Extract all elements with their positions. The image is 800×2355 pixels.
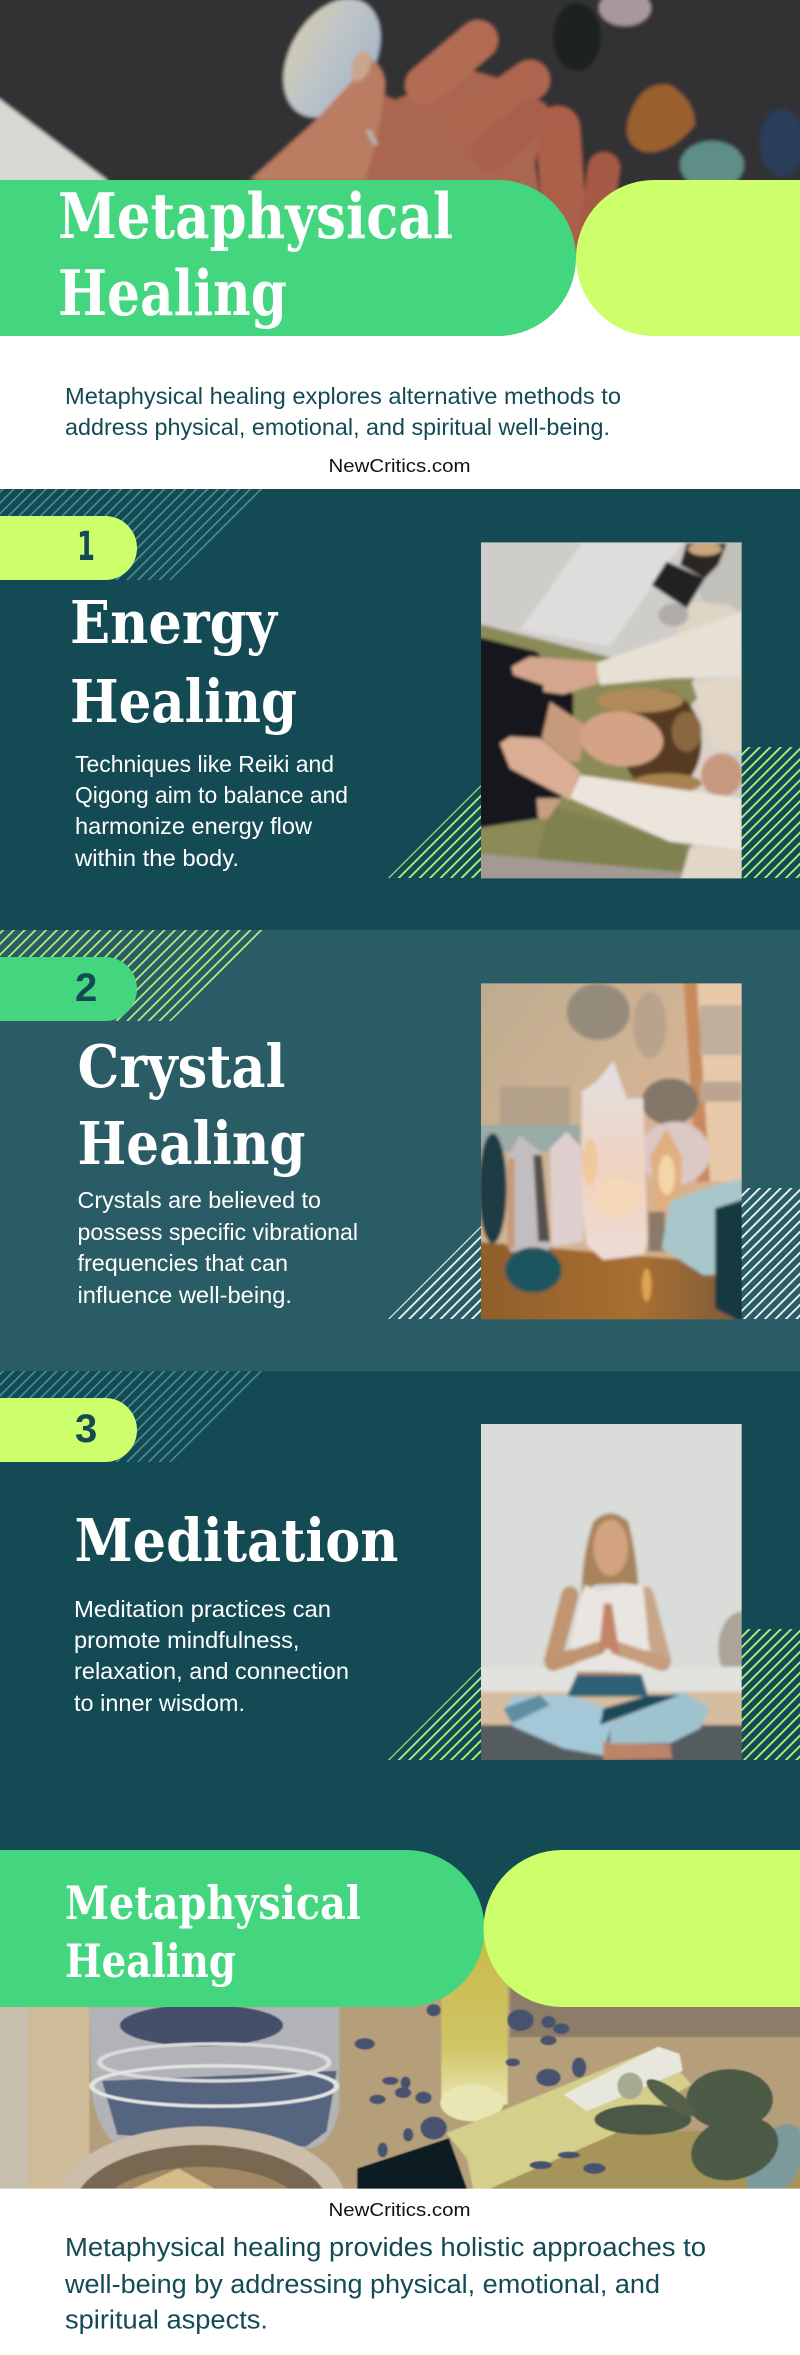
closing text: spiritual aspects. [65,2306,268,2334]
text: energy healing description: harmonize energy flow [75,813,312,839]
text: energy healing description: within the body. [74,845,239,871]
text: crystal healing description: possess specific vibrational [78,1219,358,1245]
intro text: address physical, emotional, and spiritual well-being. [65,414,610,440]
heading: meditation: Meditation [74,1506,398,1575]
intro text [65,383,621,440]
text: meditation description: relaxation, and connection [74,1658,349,1684]
panel: conclusion [0,1850,800,2334]
source credit: NewCritics.com [328,2200,470,2220]
panel: meditation [0,1371,800,1928]
heading: crystal healing [78,1032,306,1178]
closing title [65,1876,361,1988]
text: crystal healing description: frequencies that can [78,1250,288,1276]
text: crystal healing description: Crystals are believed to [78,1187,321,1213]
source credit: NewCritics.com [328,456,470,476]
closing text: well-being by addressing physical, emotional, and [64,2271,660,2299]
heading: crystal healing: Healing [78,1109,306,1178]
text: meditation description [74,1596,349,1716]
text: meditation description: Meditation practices can [74,1596,331,1622]
panel: crystal healing [0,930,800,1371]
photo: reiki session [477,538,747,885]
panel: hero [0,0,800,476]
photo: oils and dried lavender [0,1937,800,2189]
closing text [64,2234,706,2334]
number badge 2: 2 [75,966,97,1010]
text: meditation description: promote mindfulness, [74,1627,300,1653]
title: Healing [58,256,287,330]
text: energy healing description [74,751,348,871]
number badge 2 [0,957,137,1021]
number badge 1: 1 [77,524,95,570]
panel: energy healing [0,489,800,930]
heading: energy healing: Healing [70,667,297,736]
number badge 3: 3 [75,1407,97,1451]
text: energy healing description: Qigong aim to balance and [75,782,348,808]
text: crystal healing description [78,1187,358,1308]
heading: energy healing: Energy [70,588,279,657]
heading: crystal healing: Crystal [78,1032,286,1101]
intro text: Metaphysical healing explores alternative methods to [65,383,621,409]
photo: woman meditating [481,1424,742,1760]
lime accent pill [484,1850,800,2007]
title: Metaphysical [58,179,453,253]
green title pill [0,1850,484,2007]
heading: energy healing [70,588,297,736]
closing title: Healing [65,1934,236,1988]
lime accent pill [576,180,800,336]
number badge 1 [0,516,137,580]
photo: hands with crystals [0,0,800,270]
text: crystal healing description: influence well-being. [78,1282,292,1308]
title [58,179,453,330]
number badge 3 [0,1398,137,1462]
green title pill [0,180,576,336]
text: energy healing description: Techniques like Reiki and [75,751,334,777]
closing text: Metaphysical healing provides holistic approaches to [65,2234,706,2262]
closing title: Metaphysical [65,1876,361,1930]
text: meditation description: to inner wisdom. [74,1690,245,1716]
photo: crystals [477,978,747,1325]
